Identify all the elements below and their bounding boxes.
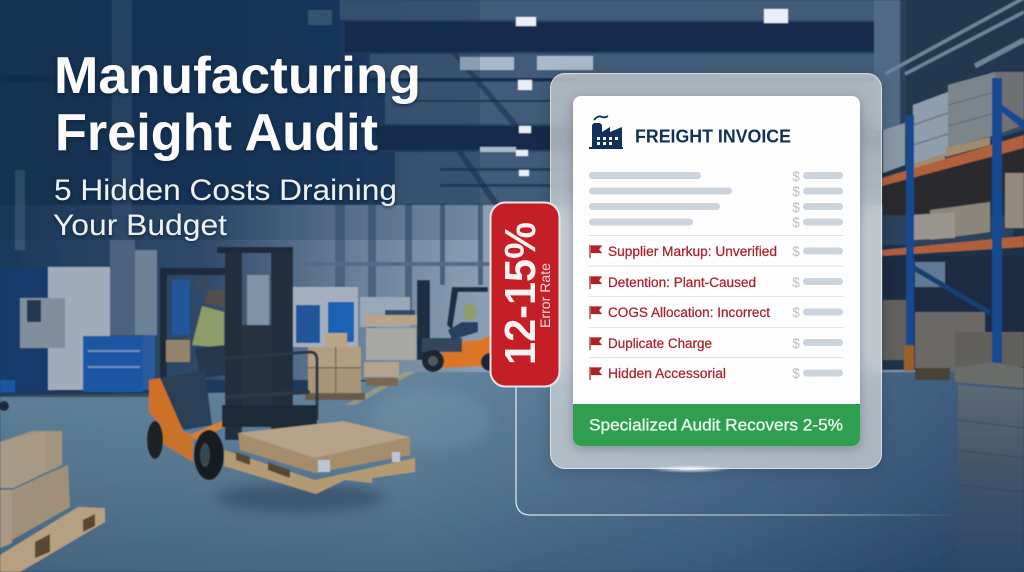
dollar signs: $ xyxy=(792,275,800,290)
dollar signs: $ xyxy=(792,215,800,230)
flagged rows: Hidden Accessorial xyxy=(608,366,726,381)
dollar signs xyxy=(792,169,800,381)
subtitle xyxy=(53,174,397,242)
dollar signs: $ xyxy=(792,305,800,320)
pallet load on forks xyxy=(224,421,415,494)
flagged rows: COGS Allocation: Incorrect xyxy=(608,305,770,320)
recovery banner: Specialized Audit Recovers 2-5% xyxy=(589,416,843,434)
rack shelves xyxy=(882,135,1024,186)
main forklift xyxy=(147,247,385,512)
title: Freight Audit xyxy=(55,104,378,162)
dollar signs: $ xyxy=(792,200,800,215)
invoice card xyxy=(573,96,860,446)
flagged rows: Detention: Plant-Caused xyxy=(608,275,756,290)
dollar signs: $ xyxy=(792,244,800,259)
error rate badge xyxy=(490,202,560,386)
background forklift xyxy=(417,280,499,372)
ceiling xyxy=(0,0,1024,215)
foreground content xyxy=(54,56,948,516)
error rate badge: Error Rate xyxy=(537,263,553,328)
dollar signs: $ xyxy=(792,169,800,184)
recovery banner xyxy=(573,404,860,446)
dark left overlay xyxy=(0,0,480,240)
distant machines and shelving xyxy=(293,287,415,347)
error rate badge: 12-15% xyxy=(496,222,545,365)
flagged rows: Supplier Markup: Unverified xyxy=(608,244,777,259)
foreground carton stack xyxy=(958,385,1024,572)
connector line xyxy=(516,387,960,515)
box stack and pallets xyxy=(305,315,417,400)
back wall xyxy=(0,205,1024,380)
icon: factory xyxy=(589,116,623,149)
title xyxy=(54,47,421,162)
foreground boxes on pallet xyxy=(0,431,105,572)
glass bottom glow xyxy=(648,465,732,473)
subtitle: 5 Hidden Costs Draining xyxy=(54,174,397,207)
invoice heading: FREIGHT INVOICE xyxy=(635,126,791,146)
title: Manufacturing xyxy=(54,47,421,105)
plain line items xyxy=(589,172,843,376)
frosted glass panel xyxy=(550,73,882,469)
left machines xyxy=(0,240,157,411)
row dividers xyxy=(589,236,843,358)
flagged rows: Duplicate Charge xyxy=(608,336,712,351)
right: column, pipes and racking xyxy=(874,0,1024,572)
dollar signs: $ xyxy=(792,336,800,351)
floor xyxy=(0,372,1024,572)
flagged rows xyxy=(590,244,777,381)
subtitle: Your Budget xyxy=(53,209,228,242)
pallet wraps xyxy=(883,123,905,173)
dollar signs: $ xyxy=(792,184,800,199)
dollar signs: $ xyxy=(792,366,800,381)
